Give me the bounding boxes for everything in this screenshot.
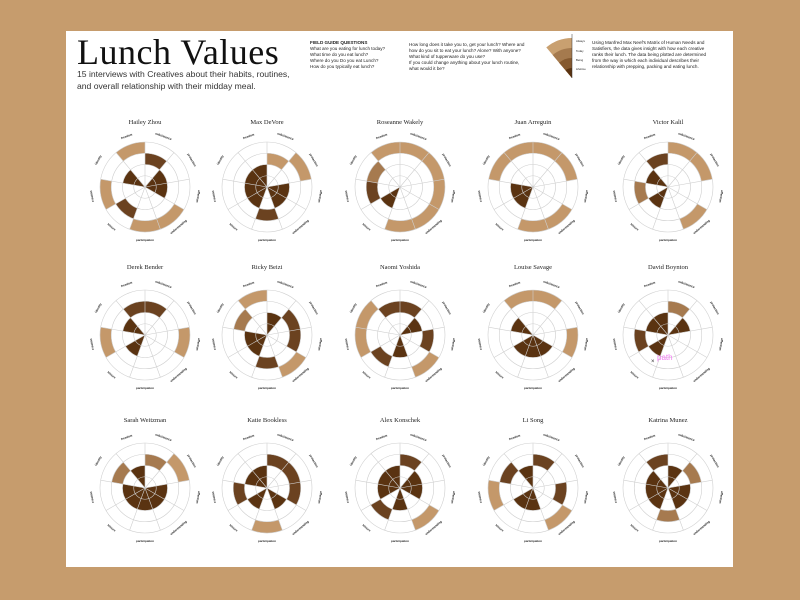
- stray path marker: [651, 353, 673, 365]
- legend wedge: Being: [576, 58, 584, 62]
- white poster panel: [66, 31, 733, 567]
- description: [592, 40, 707, 69]
- chart: Louise Savage: [477, 264, 589, 390]
- description: from the way in which each individual describes their: [592, 58, 699, 63]
- more questions: What kind of tupperware do you use?: [409, 54, 486, 59]
- chart: Li Song: Li Song: [523, 417, 544, 424]
- more questions: [409, 42, 525, 71]
- chart: Naomi Yoshida: Naomi Yoshida: [380, 264, 420, 271]
- more questions: what would it be?: [409, 66, 445, 71]
- chart: Victor Kalil: [612, 119, 724, 242]
- chart: Alex Konschek: Alex Konschek: [380, 417, 421, 424]
- chart: Derek Bender: Derek Bender: [127, 264, 164, 271]
- field guide questions: How do you typically eat lunch?: [310, 64, 375, 69]
- chart: Hailey Zhou: Hailey Zhou: [129, 119, 162, 126]
- field guide questions: What are you eating for lunch today?: [310, 46, 386, 51]
- subtitle: 15 interviews with Creatives about their habits, routines,: [77, 69, 290, 79]
- chart: Naomi Yoshida: [344, 264, 456, 390]
- chart: Li Song: [477, 417, 589, 543]
- chart: Katie Bookless: Katie Bookless: [247, 417, 287, 424]
- chart: Ricky Beizi: Ricky Beizi: [252, 264, 283, 271]
- chart: Roseanne Wakely: [344, 119, 456, 242]
- chart: Katrina Munez: [612, 417, 724, 543]
- chart: Roseanne Wakely: Roseanne Wakely: [377, 119, 424, 126]
- title: Lunch Values: [77, 32, 279, 72]
- description: ranks their lunch. The data being plotted are determined: [592, 52, 707, 57]
- chart: Max DeVore: Max DeVore: [250, 119, 284, 126]
- chart: Katrina Munez: Katrina Munez: [648, 417, 688, 424]
- field guide questions: [310, 40, 386, 69]
- chart: Louise Savage: Louise Savage: [514, 264, 552, 271]
- chart: Victor Kalil: Victor Kalil: [653, 119, 684, 126]
- legend wedge: Lifetime: [576, 67, 586, 71]
- chart: Sarah Weitzman: [89, 417, 201, 543]
- chart: Juan Arreguin: [477, 119, 589, 242]
- legend wedge: Today: [576, 49, 584, 53]
- description: Satisfiers, the data gives insight with how each creative: [592, 46, 705, 51]
- more questions: how do you sit to eat your lunch? Alone? With anyone?: [409, 48, 521, 53]
- chart: Sarah Weitzman: Sarah Weitzman: [124, 417, 167, 424]
- description: Using Manfred Max Neef's Matrix of Human Needs and: [592, 40, 705, 45]
- chart: Alex Konschek: [344, 417, 456, 543]
- stray path marker: path: [657, 353, 673, 362]
- field guide questions: Where do you Do you eat Lunch?: [310, 58, 379, 63]
- subtitle: and overall relationship with their midday meal.: [77, 81, 256, 91]
- more questions: How long does it take you to, get your lunch? Where and: [409, 42, 525, 47]
- stray path marker: ×: [651, 359, 655, 365]
- chart: Katie Bookless: [211, 417, 323, 543]
- chart: David Boynton: [612, 264, 724, 390]
- legend wedge: Always: [576, 39, 585, 43]
- description: relationship with prepping, packing and eating lunch.: [592, 64, 699, 69]
- field guide questions: FIELD GUIDE QUESTIONS: [310, 40, 367, 45]
- chart: Max DeVore: [211, 119, 323, 242]
- legend wedge: [546, 34, 586, 78]
- subtitle: [77, 69, 290, 91]
- chart: Ricky Beizi: [211, 264, 323, 390]
- chart: Derek Bender: [89, 264, 201, 390]
- chart: Hailey Zhou: [89, 119, 201, 242]
- more questions: If you could change anything about your lunch routine,: [409, 60, 519, 65]
- chart: Juan Arreguin: Juan Arreguin: [515, 119, 552, 126]
- field guide questions: What time do you eat lunch?: [310, 52, 369, 57]
- chart: David Boynton: David Boynton: [648, 264, 689, 271]
